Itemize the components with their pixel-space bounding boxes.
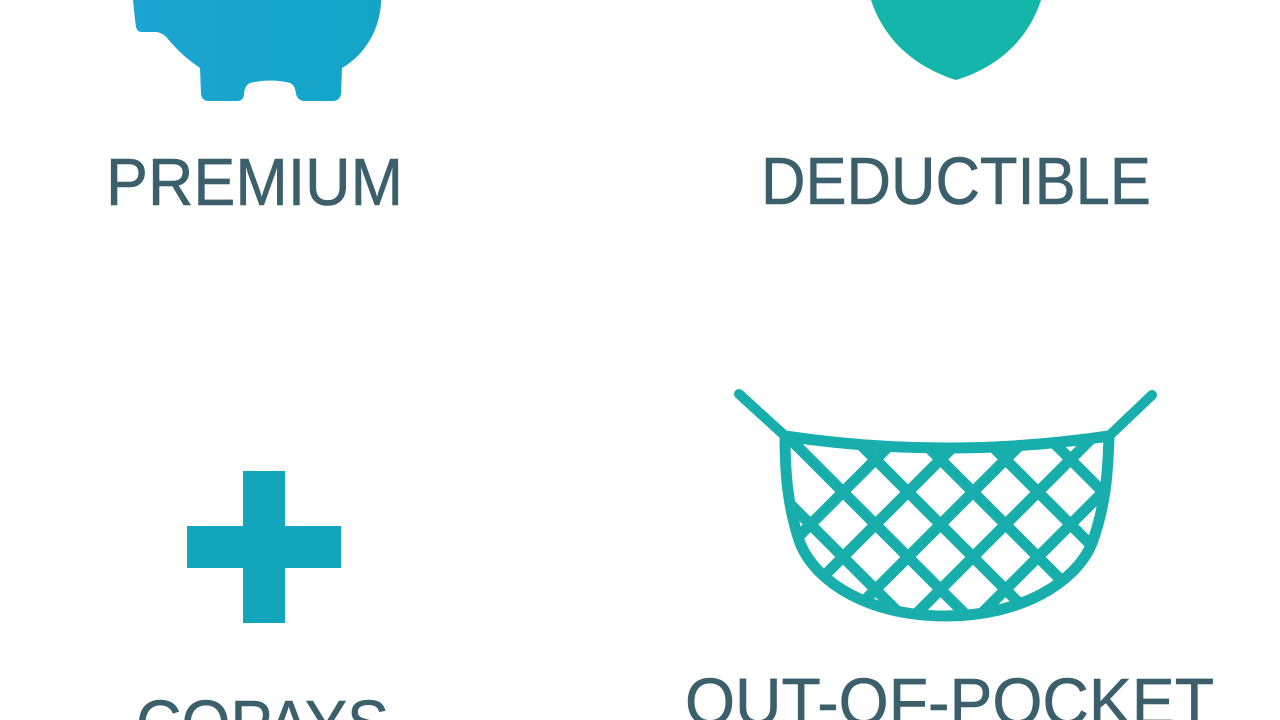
icon: piggy bank bbox=[133, 0, 381, 101]
label: premium: PREMIUM bbox=[106, 145, 403, 220]
icon: shield bbox=[871, 0, 1041, 80]
icon: plus cross bbox=[187, 471, 341, 623]
icon: safety net bbox=[734, 389, 1157, 622]
label: deductible: DEDUCTIBLE bbox=[761, 144, 1151, 219]
